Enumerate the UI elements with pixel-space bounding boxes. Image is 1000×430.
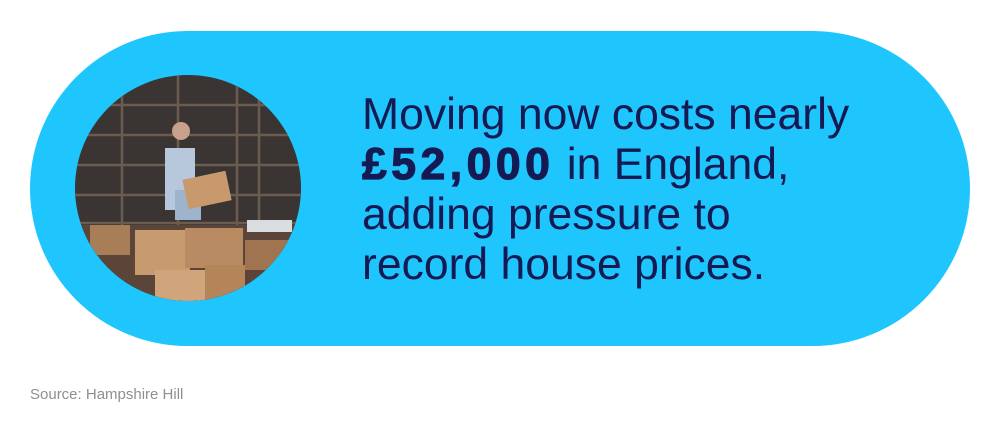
headline text: record house prices. [362, 240, 765, 289]
source note: Source: Hampshire Hill [30, 386, 183, 403]
headline text: adding pressure to [362, 190, 731, 239]
photo: man packing boxes [75, 75, 301, 301]
headline text: £52,000 in England, [362, 140, 789, 189]
headline text: Moving now costs nearly [362, 90, 849, 139]
panel: blue pill [30, 31, 970, 346]
headline text [362, 90, 850, 289]
